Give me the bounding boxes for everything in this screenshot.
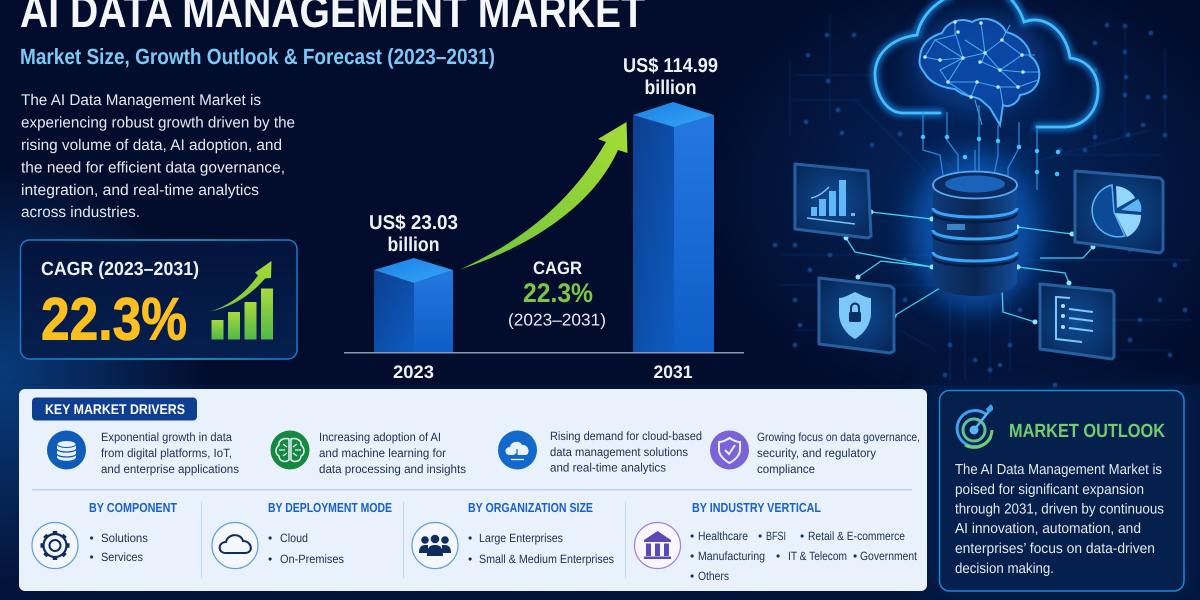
intro paragraph: integration, and real-time analytics [21, 182, 259, 199]
segment: by industry vertical: Government [860, 549, 918, 563]
driver text: and real-time analytics [550, 460, 666, 474]
driver text: security, and regulatory [757, 446, 876, 460]
segment: by industry vertical: Healthcare [698, 529, 748, 543]
segment: by industry vertical: Manufacturing [698, 549, 765, 563]
badge: key market drivers: KEY MARKET DRIVERS [45, 401, 185, 417]
CAGR value: 22.3% [41, 286, 187, 352]
driver text: data management solutions [550, 445, 688, 459]
driver: AI adoption [270, 430, 466, 476]
segment: by industry vertical: • [853, 549, 857, 563]
value label 2031 [623, 55, 718, 99]
driver text [550, 429, 702, 474]
segment: by organization size: Small & Medium Enterprises [479, 552, 614, 566]
segment: by industry vertical: • [690, 569, 694, 583]
glow behind brain [914, 14, 1046, 110]
outlook text: enterprises’ focus on data-driven [955, 541, 1155, 557]
segment: by industry vertical: BFSI [766, 529, 786, 543]
driver: cloud demand [498, 429, 702, 474]
value label 2031: billion [644, 77, 696, 99]
panel: analytics chart card [795, 164, 871, 238]
glow behind cylinder [911, 154, 1039, 310]
bar chart: market size [344, 55, 744, 382]
driver text: Growing focus on data governance, [757, 430, 920, 444]
outlook heading: MARKET OUTLOOK [1009, 421, 1165, 442]
intro paragraph [21, 92, 295, 221]
intro paragraph: across industries. [21, 204, 140, 221]
intro paragraph: experiencing robust growth driven by the [21, 114, 295, 132]
segment: by component [32, 500, 177, 568]
segment: by deployment mode [212, 500, 392, 568]
segment: by deployment mode: On-Premises [280, 552, 344, 566]
icon: gear [32, 522, 78, 568]
panel: security shield card [819, 278, 894, 353]
driver text: and machine learning for [319, 446, 446, 460]
intro paragraph: The AI Data Management Market is [21, 92, 261, 109]
segment: by organization size: • [468, 531, 472, 545]
illustration: AI cloud and database [775, 0, 1190, 385]
driver text: from digital platforms, IoT, [101, 446, 232, 460]
value label 2023 [369, 212, 458, 256]
year label 2023: 2023 [393, 362, 434, 382]
growth arrow [460, 122, 628, 270]
CAGR annotation: CAGR [533, 258, 582, 278]
panel: key market drivers and segments [19, 389, 927, 591]
bar 2031 [633, 102, 714, 352]
data circuit background [775, 15, 1190, 385]
subtitle: Market Size, Growth Outlook & Forecast (2023–2031) [20, 44, 495, 69]
brain [919, 19, 1040, 125]
segment: by industry vertical: • [758, 529, 762, 543]
segment: by deployment mode: • [268, 531, 272, 545]
icon: growth bars with arrow [210, 261, 273, 340]
outlook text: The AI Data Management Market is [955, 462, 1162, 478]
CAGR label: CAGR (2023–2031) [41, 259, 199, 280]
segment: by organization size: Large Enterprises [479, 531, 563, 545]
segment: by deployment mode: Cloud [280, 531, 308, 545]
segment: by component: Solutions [101, 531, 148, 545]
CAGR annotation: 22.3% [523, 278, 593, 308]
driver: governance [710, 430, 920, 476]
outlook text: poised for significant expansion [955, 482, 1144, 498]
segment: by industry vertical: • [690, 529, 694, 543]
segment: by component: • [90, 531, 94, 545]
segment: by deployment mode: BY DEPLOYMENT MODE [268, 500, 392, 515]
icon: shield [710, 430, 749, 470]
outlook text [955, 462, 1164, 577]
driver text: Increasing adoption of AI [319, 430, 441, 444]
badge: key market drivers [32, 398, 197, 420]
icon: people [412, 522, 458, 568]
intro paragraph: rising volume of data, AI adoption, and [21, 137, 282, 154]
driver text: and enterprise applications [101, 462, 239, 476]
value label 2023: billion [388, 234, 440, 256]
panel: CAGR callout [20, 240, 297, 359]
CAGR annotation: (2023–2031) [508, 310, 606, 330]
panel: checklist card [1040, 284, 1114, 359]
outlook text: AI innovation, automation, and [955, 521, 1141, 537]
CAGR annotation [508, 258, 606, 330]
icon: cloud outline [212, 522, 258, 568]
icon: database [47, 430, 86, 470]
driver text [757, 430, 920, 476]
segment: by organization size [412, 500, 614, 568]
icon: bank building [634, 522, 680, 568]
segment: by industry vertical: • [776, 549, 780, 563]
icon: cloud [498, 430, 537, 470]
value label 2031: US$ 114.99 [623, 55, 718, 77]
icon: brain [270, 430, 310, 470]
database cylinder [933, 172, 1017, 296]
driver text: data processing and insights [319, 462, 466, 476]
outlook text: through 2031, driven by continuous [955, 502, 1164, 518]
segment: by industry vertical: Others [698, 569, 729, 583]
driver text: Rising demand for cloud-based [550, 429, 702, 443]
driver text [319, 430, 466, 476]
driver: data growth [47, 430, 239, 476]
intro paragraph: the need for efficient data governance, [21, 160, 285, 176]
axis [344, 352, 744, 354]
segment: by component: BY COMPONENT [89, 500, 177, 515]
segment: by industry vertical: IT & Telecom [788, 549, 847, 563]
segment: by deployment mode: • [268, 552, 272, 566]
segment: by industry vertical: BY INDUSTRY VERTICAL [692, 500, 821, 515]
value label 2023: US$ 23.03 [369, 212, 458, 234]
icon: target with arrow [957, 404, 993, 447]
driver text: compliance [757, 462, 815, 476]
segment: by industry vertical [634, 500, 918, 583]
year label 2031: 2031 [654, 362, 692, 382]
segment: by industry vertical: Retail & E-commerce [808, 529, 905, 543]
driver text: Exponential growth in data [101, 430, 232, 444]
segment: by organization size: • [468, 552, 472, 566]
panel: market outlook [940, 390, 1184, 591]
segment: by industry vertical: • [800, 529, 804, 543]
connectors [846, 212, 1093, 322]
segment: by component: Services [101, 550, 143, 564]
data streams [923, 105, 1058, 190]
panel: pie chart card [1075, 171, 1163, 253]
driver text [101, 430, 239, 476]
cloud [875, 0, 1098, 127]
segment: by industry vertical: • [690, 549, 694, 563]
segment: by organization size: BY ORGANIZATION SIZE [468, 500, 593, 515]
outlook text: decision making. [955, 561, 1054, 577]
segment: by component: • [90, 550, 94, 564]
bar 2023 [374, 258, 453, 352]
